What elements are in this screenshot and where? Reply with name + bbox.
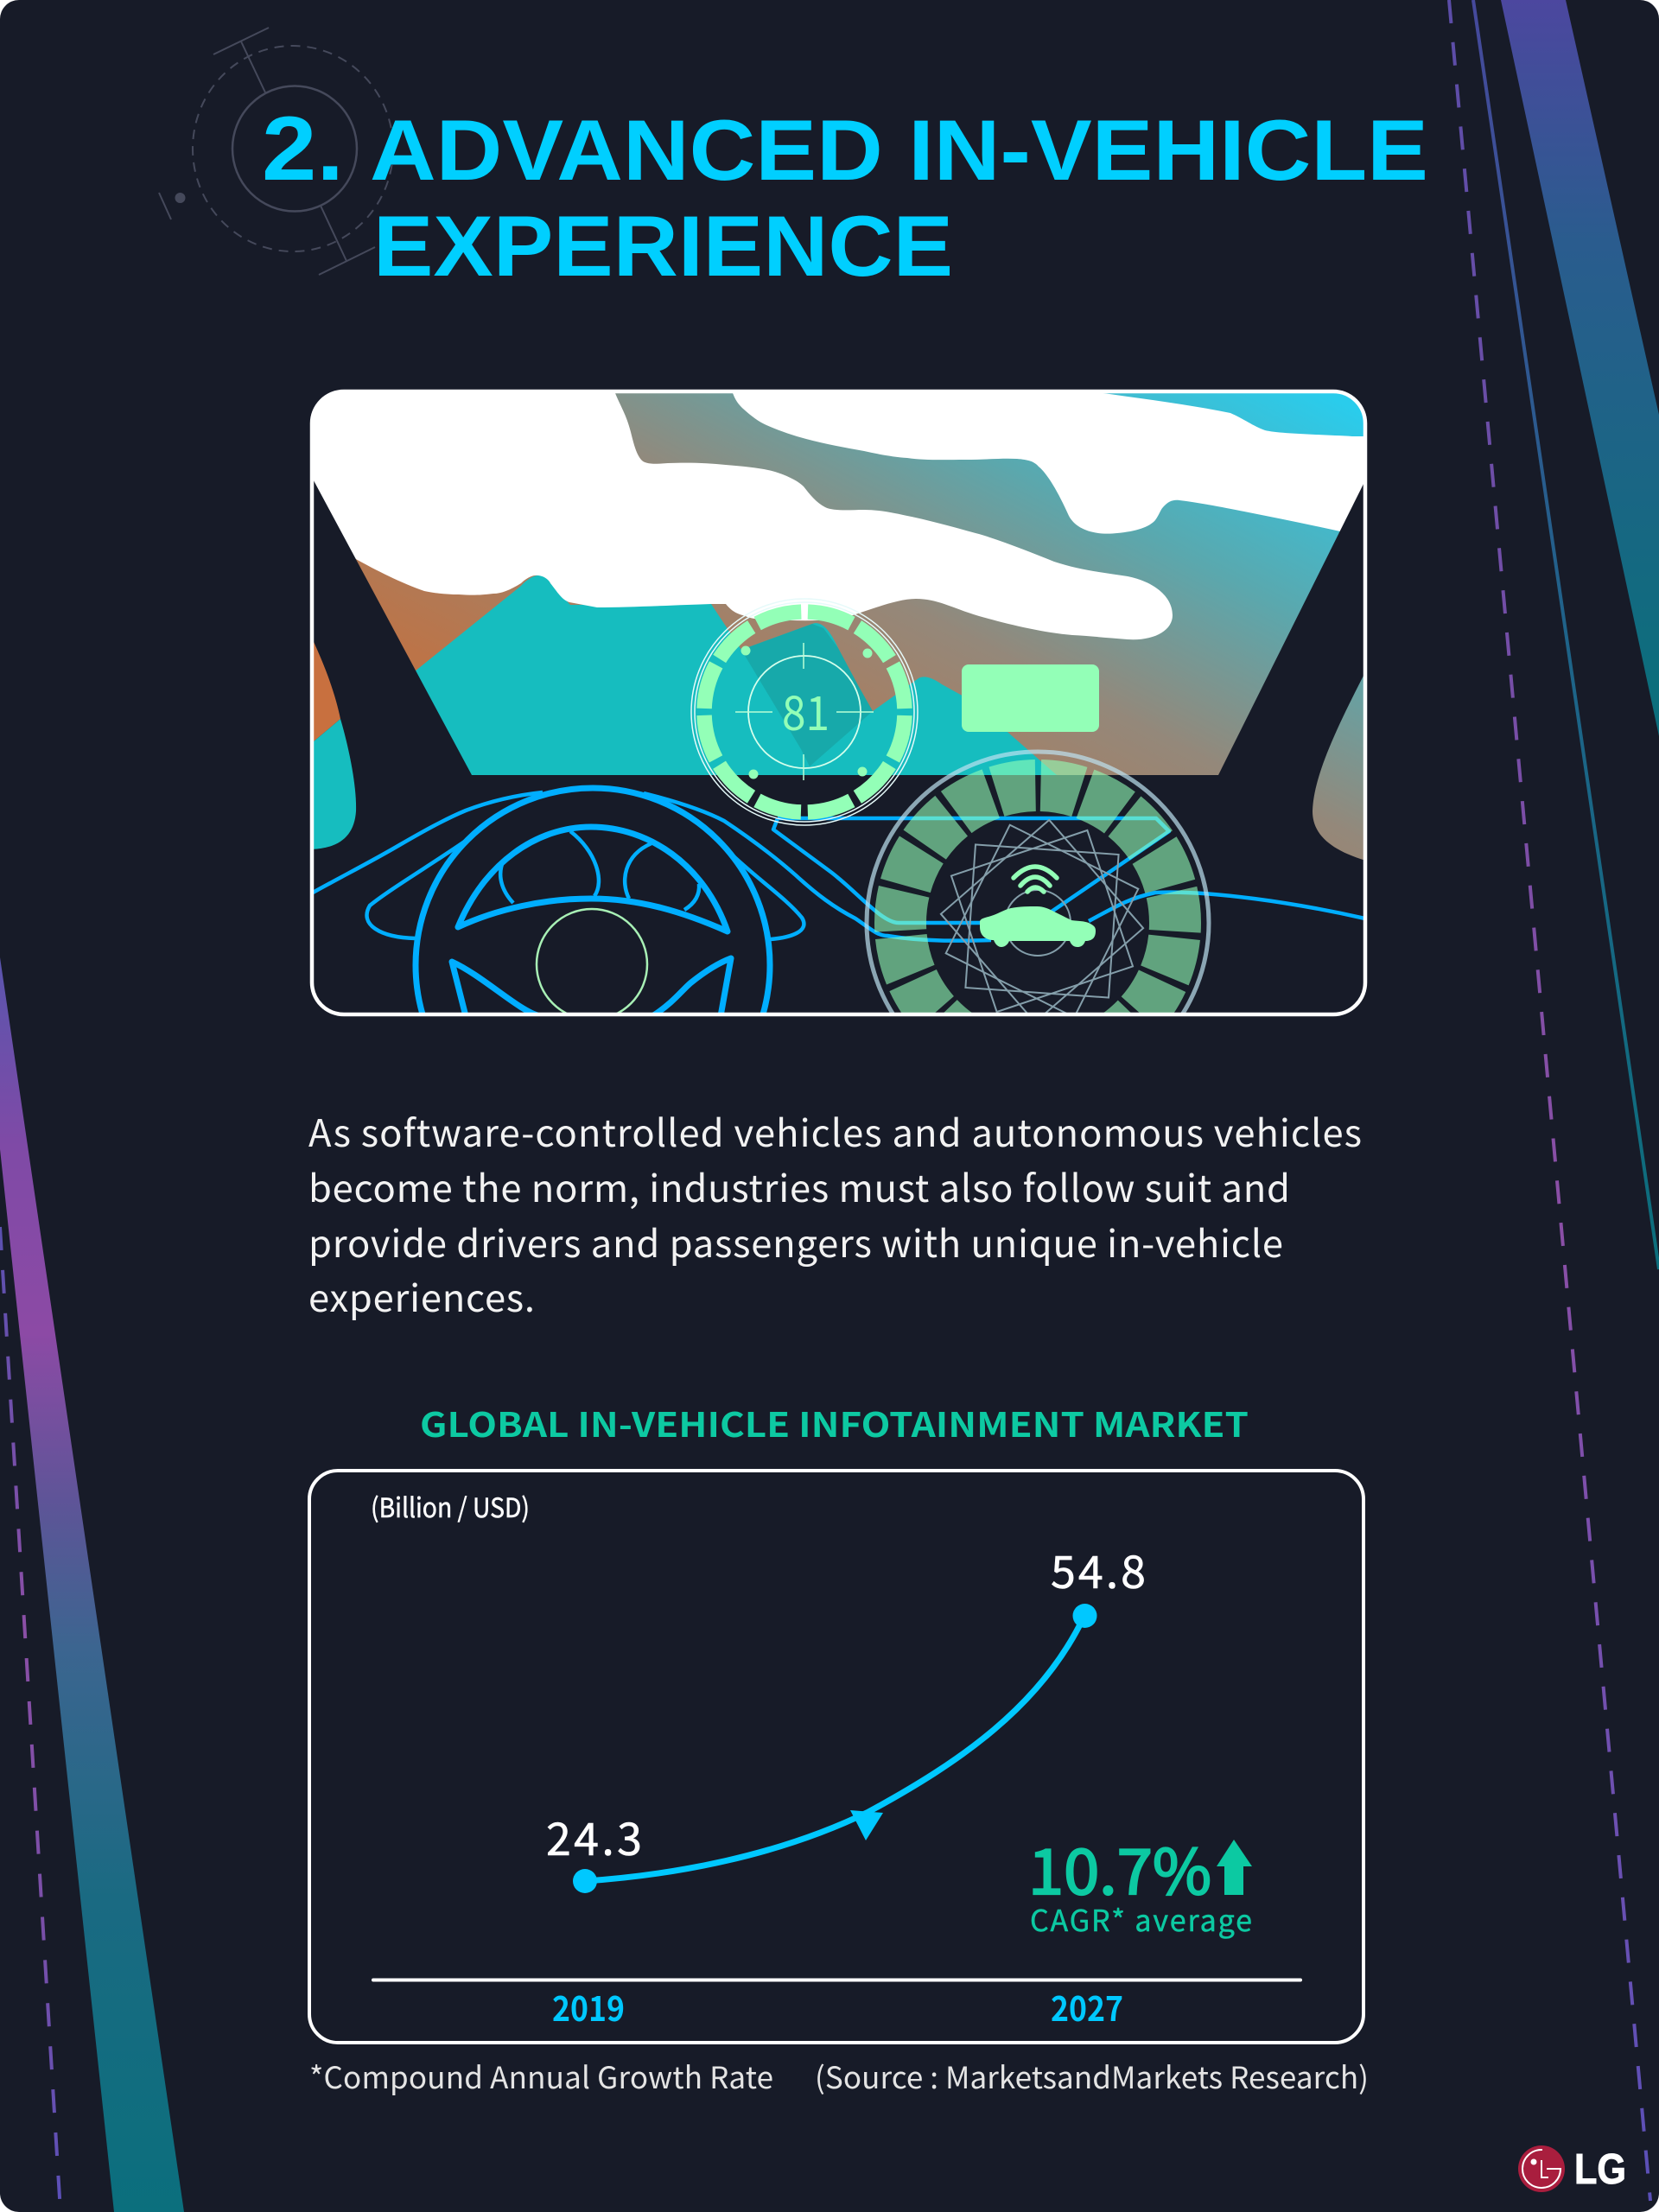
decorative diagonal stripes right (1449, 0, 1659, 2201)
body paragraph: experiences. (308, 1268, 535, 1323)
illustration frame (312, 391, 1365, 1014)
x axis (373, 1979, 1300, 1982)
chart heading: GLOBAL IN-VEHICLE INFOTAINMENT MARKET (420, 1399, 1249, 1447)
title: EXPERIENCE (373, 198, 953, 294)
steering wheel hub (537, 909, 647, 1020)
LG logo (1518, 2145, 1626, 2193)
title (262, 99, 1428, 294)
title: ADVANCED IN-VEHICLE (370, 102, 1428, 198)
callout: CAGR (1028, 1821, 1252, 1940)
gauge cluster (864, 750, 1211, 1013)
icon: title target reticle (159, 28, 393, 275)
dashboard and steering wheel outlines (314, 785, 1363, 1013)
axis label 2019: 2019 (552, 1981, 625, 2031)
axis label 2027: 2027 (1051, 1981, 1123, 2031)
body paragraph: As software-controlled vehicles and autonomous vehicles (308, 1103, 1362, 1158)
title: 2. (262, 99, 344, 200)
body paragraph (308, 1103, 1362, 1323)
footnote: *Compound Annual Growth Rate (309, 2054, 773, 2098)
LG logo: LG (1574, 2146, 1626, 2193)
unit label: (Billion / USD) (371, 1486, 530, 1525)
head-up display speed dial: 81 (782, 675, 830, 744)
head-up display speed dial (691, 599, 918, 825)
body paragraph: provide drivers and passengers with unique in-vehicle (308, 1214, 1283, 1268)
source note: (Source : MarketsandMarkets Research) (815, 2054, 1369, 2098)
head-up display info card (962, 664, 1099, 732)
icon: connected car with signal (980, 867, 1096, 947)
chart frame (309, 1471, 1363, 2043)
decorative diagonal stripes left (0, 957, 184, 2212)
value 2027: 54.8 (1051, 1536, 1146, 1601)
body paragraph: become the norm, industries must also follow suit and (308, 1159, 1290, 1213)
value 2019: 24.3 (546, 1803, 642, 1868)
callout: CAGR: 10.7% (1028, 1821, 1211, 1912)
callout: CAGR: CAGR* average (1030, 1897, 1252, 1940)
growth curve with arrow (573, 1604, 1097, 1893)
panel: in-vehicle illustration (309, 389, 1367, 1016)
windshield scenery (302, 380, 1376, 863)
panel: market line chart (309, 1471, 1363, 2043)
